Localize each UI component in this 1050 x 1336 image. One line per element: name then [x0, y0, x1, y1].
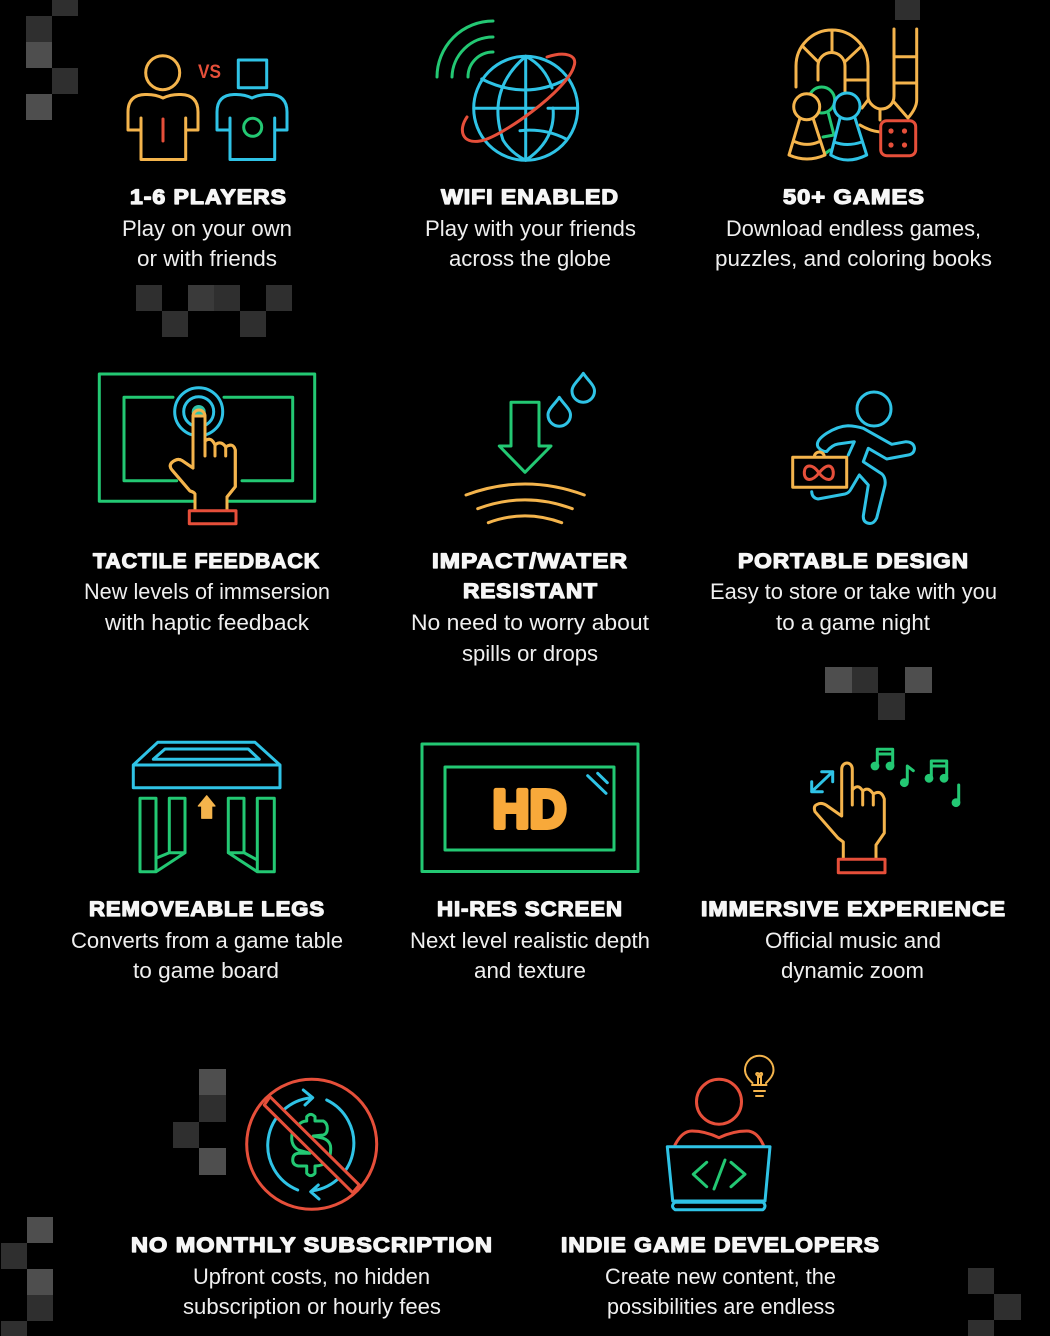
description — [71, 928, 343, 983]
icon: table with legs — [133, 742, 280, 872]
panel: immersive experience — [701, 749, 1006, 983]
description: to a game night — [776, 610, 931, 635]
panel: portable design — [710, 392, 997, 635]
description — [765, 928, 941, 983]
icon: two players versus: VS — [198, 62, 221, 83]
heading: IMMERSIVE EXPERIENCE — [701, 897, 1006, 921]
description: Upfront costs, no hidden — [193, 1264, 430, 1289]
description: spills or drops — [462, 641, 598, 666]
heading: RESISTANT — [463, 579, 598, 603]
heading: HI-RES SCREEN — [437, 897, 623, 921]
description — [183, 1264, 441, 1319]
description: to game board — [133, 958, 279, 983]
icon: running person with case — [793, 392, 914, 524]
heading: REMOVEABLE LEGS — [89, 897, 325, 921]
heading: TACTILE FEEDBACK — [93, 549, 320, 573]
description: Easy to store or take with you — [710, 579, 997, 604]
description — [605, 1264, 836, 1319]
description: dynamic zoom — [781, 958, 924, 983]
description: Create new content, the — [605, 1264, 836, 1289]
description — [715, 216, 992, 271]
heading: PORTABLE DESIGN — [738, 549, 969, 573]
description — [411, 610, 650, 666]
panel: tactile feedback — [84, 374, 330, 635]
description: and texture — [474, 958, 586, 983]
panel: 50+ games — [715, 29, 992, 271]
heading: INDIE GAME DEVELOPERS — [561, 1233, 880, 1257]
panel: indie game developers — [561, 1056, 880, 1319]
description: Play on your own — [122, 216, 292, 241]
panel: impact and water resistant — [411, 373, 650, 666]
icon: crossed out dollar — [247, 1079, 377, 1209]
description: possibilities are endless — [607, 1294, 835, 1319]
description: Official music and — [765, 928, 941, 953]
description: subscription or hourly fees — [183, 1294, 441, 1319]
description: Next level realistic depth — [410, 928, 650, 953]
panel: wifi enabled — [425, 21, 636, 271]
panel: 1-6 players — [122, 56, 292, 271]
panel: removeable legs — [71, 742, 343, 983]
description: puzzles, and coloring books — [715, 246, 992, 271]
description: Play with your friends — [425, 216, 636, 241]
panel: hi-res screen — [410, 744, 650, 983]
icon: developer with laptop and bulb — [667, 1056, 774, 1210]
description: or with friends — [137, 246, 277, 271]
icon: board game pieces — [789, 29, 917, 160]
description — [122, 216, 292, 271]
description — [425, 216, 636, 271]
description — [410, 928, 650, 983]
heading: IMPACT/WATER — [432, 549, 628, 573]
heading: NO MONTHLY SUBSCRIPTION — [131, 1233, 493, 1257]
description: Converts from a game table — [71, 928, 343, 953]
icon: HD screen: HD — [492, 780, 566, 840]
icon: globe with wifi — [437, 21, 578, 160]
icon: HD screen — [422, 744, 638, 872]
panel: no monthly subscription — [131, 1079, 493, 1319]
icon: two players versus — [128, 56, 287, 160]
description — [710, 579, 997, 635]
description: across the globe — [449, 246, 611, 271]
heading: 1-6 PLAYERS — [130, 185, 287, 209]
description: with haptic feedback — [104, 610, 310, 635]
description — [84, 579, 330, 635]
heading: 50+ GAMES — [783, 185, 925, 209]
icon: hand touching screen — [99, 374, 315, 524]
description: New levels of immsersion — [84, 579, 330, 604]
heading: WIFI ENABLED — [441, 185, 619, 209]
heading — [432, 549, 628, 603]
description: Download endless games, — [726, 216, 981, 241]
icon: hand with zoom and music — [812, 749, 960, 873]
icon: arrow, drops and ripples — [466, 373, 594, 523]
description: No need to worry about — [411, 610, 650, 635]
